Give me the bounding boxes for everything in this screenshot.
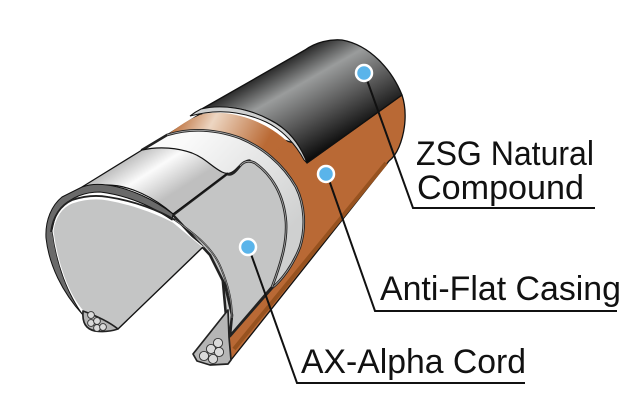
crown seam line (173, 173, 228, 214)
label: ZSG Natural (416, 135, 594, 173)
label line 2: Compound (417, 169, 584, 207)
tire illustration (46, 40, 405, 365)
callout: ZSG Natural Compound (356, 65, 595, 208)
white inner casing layer (142, 130, 304, 338)
inner opening edge (118, 247, 203, 329)
orange strip shadow (234, 163, 386, 349)
anti-flat casing: orange outer layer (167, 95, 405, 360)
label: AX-Alpha Cord (301, 343, 526, 381)
marker dot (240, 239, 256, 255)
silver crown band (82, 148, 250, 214)
callout: AX-Alpha Cord (240, 239, 526, 383)
rear wall edge line (240, 161, 286, 287)
marker dot (318, 166, 334, 182)
marker dot (356, 65, 372, 81)
leader line (251, 254, 525, 383)
white layer double-line highlight (167, 130, 304, 338)
front bead ring dark edge (46, 184, 173, 315)
leader line (367, 80, 595, 208)
callout: Anti-Flat Casing (318, 166, 621, 311)
tread: black rubber (200, 40, 402, 163)
liner light line (175, 220, 232, 318)
label: Anti-Flat Casing (380, 270, 621, 308)
right bead with cords (193, 310, 231, 365)
AX-Alpha cord: rear inner wall (173, 161, 286, 336)
liner dark line (51, 196, 232, 337)
left bead with cords (83, 311, 118, 331)
leader line (329, 180, 617, 311)
light grey rim under tread (190, 107, 307, 163)
inner grey liner front (53, 199, 203, 329)
casing highlight band (167, 113, 307, 200)
